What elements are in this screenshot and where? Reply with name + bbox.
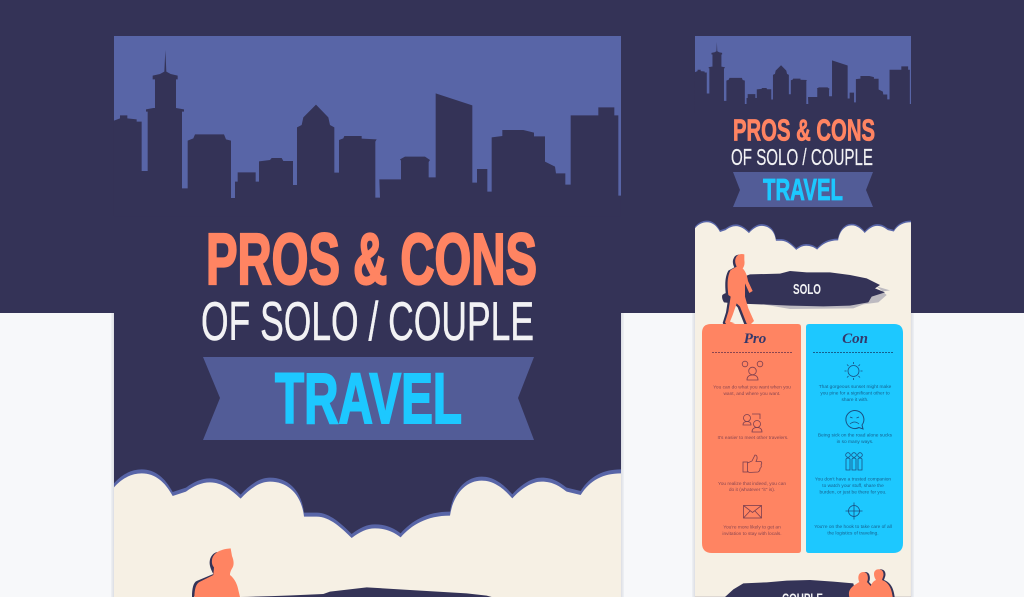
small title: travel: TRAVEL [763, 173, 843, 207]
couple brush banner [725, 580, 857, 597]
title: travel: TRAVEL [275, 360, 462, 439]
con text 2: Being sick on the road alone sucks [818, 432, 893, 438]
pro text 1: want, and where you want. [723, 391, 781, 397]
panel: large infographic preview [114, 36, 621, 597]
small ribbon [733, 172, 873, 207]
icon: target [846, 502, 862, 520]
small skyline [695, 42, 911, 113]
title: pros and cons: PROS & CONS [206, 220, 537, 300]
subtitle: of solo / couple: OF SOLO / COUPLE [201, 290, 534, 352]
con text 1: That gorgeous sunset might make [819, 384, 892, 390]
icon: friends [742, 361, 763, 380]
con text 1: you pine for a significant other to [820, 390, 890, 396]
con text 4: You're on the hook to take care of all [814, 524, 892, 530]
panel: con column [806, 324, 903, 553]
small cloud edge [695, 221, 911, 597]
pro text 4: You're more likely to get an [723, 524, 781, 530]
icon: thumbs up [743, 455, 762, 472]
brush banner and traveller [192, 548, 492, 597]
panel: small infographic preview [695, 36, 911, 597]
panel shadows [111, 313, 914, 597]
con text 4: the logistics of traveling. [827, 530, 879, 536]
icon: meet people [743, 414, 762, 432]
icon: envelope [744, 506, 762, 518]
con divider [813, 352, 894, 354]
con text 3: burden, or just be there for you. [820, 490, 886, 496]
pro text 3: do it (whatever "it" is). [729, 487, 775, 493]
cloud edge [114, 469, 621, 597]
pro divider [712, 352, 792, 354]
pro text 2: It's easier to meet other travelers. [717, 435, 789, 441]
con heading: Con [842, 331, 868, 347]
small sky [695, 36, 911, 104]
small title: pros and cons: PROS & CONS [733, 114, 875, 148]
solo brush banner [722, 271, 890, 309]
solo label: SOLO [793, 281, 821, 298]
con text 3: You don't have a trusted companion [815, 476, 891, 482]
con text 3: to watch your stuff, share the [822, 483, 884, 489]
pro text 3: You realize that indeed, you can [718, 481, 786, 487]
pro heading: Pro [744, 331, 766, 347]
small subtitle: OF SOLO / COUPLE [731, 144, 873, 170]
con text 2: in so many ways. [837, 439, 873, 445]
pro text 4: invitation to stay with locals. [722, 531, 782, 537]
icon: couple [849, 569, 895, 597]
panel: pro column [702, 324, 801, 553]
icon: sad speech bubble [846, 411, 864, 429]
con text 1: share it with. [842, 397, 868, 403]
sky [114, 36, 621, 198]
icon: solo traveller [723, 254, 754, 326]
skyline [114, 50, 621, 217]
ribbon [203, 357, 534, 440]
pro text 1: You can do what you want when you [713, 384, 791, 390]
icon: sun [844, 362, 862, 380]
background band [0, 0, 1024, 313]
icon: group of people [846, 453, 862, 470]
